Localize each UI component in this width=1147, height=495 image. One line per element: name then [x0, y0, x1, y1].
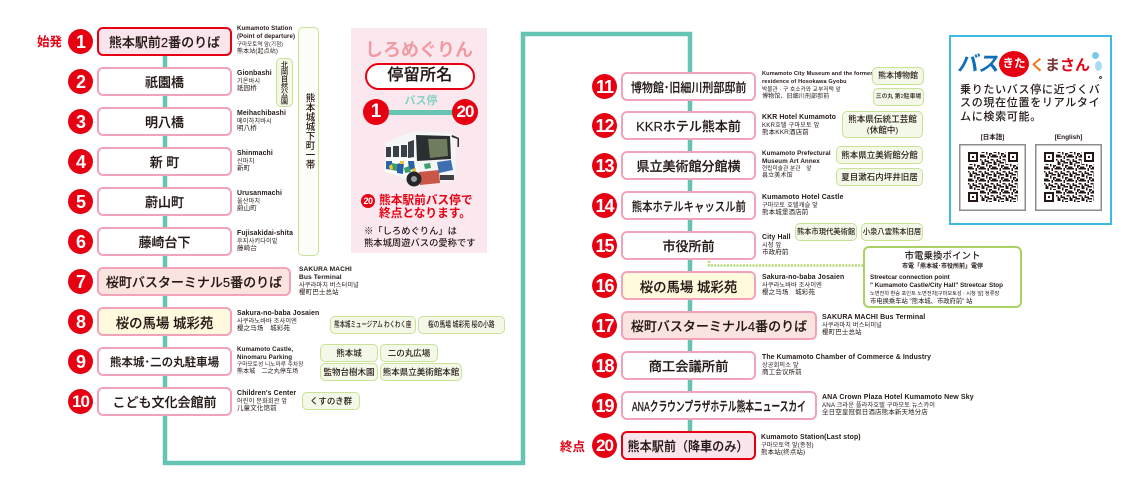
stop 13: 县立美术馆 — [762, 173, 793, 179]
stop 14: 熊本城堡酒店前 — [762, 209, 808, 216]
callout heading: 市電乗換ポイント — [904, 251, 980, 262]
legend route sample: 20 — [457, 102, 473, 121]
stop 13: 13 — [595, 156, 614, 176]
search description — [960, 84, 1100, 123]
callout details: Streetcar connection point — [870, 274, 950, 281]
tag: Wakuwaku-za — [330, 316, 416, 334]
QR label English: [English] — [1055, 134, 1082, 141]
tag: castle town area — [298, 27, 319, 256]
tag: Kitaoka park: 北岡自然公園 — [280, 61, 290, 104]
panel: Shiromegurin legend — [351, 28, 487, 253]
tag: Art Museum annex — [836, 146, 923, 164]
stop 11 — [592, 71, 872, 101]
tag: castle town area: 熊本城城下町一帯 — [304, 93, 314, 169]
tag: Kitaoka park — [276, 58, 293, 107]
callout details: 市电换乘车站 "熊本城、市政府前" 站 — [870, 298, 972, 305]
legend route sample — [363, 94, 478, 125]
stop 8: 桜の馬場 城彩苑 — [116, 316, 213, 330]
tag: Sannomaru parking — [873, 88, 924, 106]
stop 8: 8 — [76, 312, 85, 332]
note: terminus: 20 — [363, 196, 372, 206]
stop 6 — [68, 227, 293, 256]
stop 19: 19 — [595, 396, 614, 416]
stop 18: 상공회의소 앞 — [762, 362, 799, 369]
tag: Kenmotsudai — [320, 363, 378, 381]
callout details — [870, 274, 1003, 305]
note: terminus: 熊本駅前バス停で — [379, 194, 473, 207]
stop 18: 18 — [595, 356, 614, 376]
stop 10 — [68, 387, 296, 416]
stop 13: 현립미술관 분관 앞 — [762, 166, 812, 172]
stop 20: 20 — [596, 436, 613, 455]
stop 19: ANA Crown Plaza Hotel Kumamoto New Sky — [822, 394, 974, 401]
stop 19 — [592, 391, 974, 420]
stop 5: 蔚山町 — [237, 205, 257, 212]
logo: Bus Kitakumasan — [956, 51, 1102, 79]
stop 1: 구마모토역 앞(기점) — [237, 42, 283, 48]
tag: Kenmotsudai: 監物台樹木園 — [323, 367, 374, 377]
stop 6: 6 — [76, 232, 85, 252]
stop 12: KKR호텔 구마모토 앞 — [762, 122, 819, 129]
icon: bus — [385, 131, 459, 186]
stop 2: 祇園橋 — [145, 75, 184, 90]
stop 17: 사쿠라마치 버스터미널 — [822, 322, 882, 329]
stop 17: 17 — [595, 316, 614, 336]
stop 1: (Point of departure) — [237, 34, 295, 40]
stop 20: 구마모토역 앞(종점) — [761, 442, 814, 449]
stop 9: Kumamoto Castle, — [237, 346, 293, 353]
stop 15: 시청 앞 — [762, 242, 781, 249]
stop 15: 市役所前 — [662, 239, 714, 254]
stop 12: 熊本KKR酒店前 — [762, 129, 809, 136]
tag: Contemporary Art Museum: 熊本市現代美術館 — [797, 227, 855, 236]
stop 9 — [68, 346, 304, 376]
stop 13: Kumamoto Prefectural — [762, 150, 831, 157]
legend heading pill: 停留所名 — [387, 67, 453, 84]
stop 10: 어린이 문화회관 앞 — [237, 398, 287, 405]
tag: Sannomaru parking: 三の丸 第2駐車場 — [876, 94, 921, 100]
stop 5: 蔚山町 — [145, 195, 184, 210]
stop 7: 사쿠라마치 버스터미널 — [299, 282, 359, 288]
stop 8: Sakura-no-baba Josaien — [237, 310, 319, 317]
stop 13: Museum Art Annex — [762, 158, 820, 165]
stop 3: 明八橋 — [145, 115, 184, 130]
QR code English — [1035, 144, 1102, 211]
stop 12: KKRホテル熊本前 — [636, 119, 741, 134]
stop 1: 熊本站(起点站) — [237, 49, 278, 55]
stop 14: 熊本ホテルキャッスル前 — [631, 200, 746, 214]
stop 5 — [68, 187, 282, 216]
logo: Bus Kitakumasan: バス — [956, 53, 1002, 76]
callout details: 노면전차 환승 포인트 노면전차[구마모토성 · 시청 앞] 정류장 — [870, 291, 999, 297]
stop 18: The Kumamoto Chamber of Commerce & Industry — [762, 354, 931, 361]
stop 3: 明八桥 — [237, 125, 257, 132]
label: terminus: 終点 — [560, 440, 585, 454]
stop 16: 桜の馬場 城彩苑 — [640, 280, 737, 294]
stop 2: Gionbashi — [237, 70, 272, 77]
search description: スの現在位置をリアルタイ — [960, 97, 1100, 109]
callout subheading: 市電「熊本城･市役所前」電停 — [902, 264, 983, 270]
stop 19: ANAクラウンプラザホテル熊本ニュースカイ — [632, 399, 806, 414]
search description: 乗りたいバス停に近づくバ — [960, 84, 1100, 96]
stop 10: こども文化会館前 — [112, 395, 216, 410]
stop 7: 7 — [76, 272, 85, 292]
stop 7 — [68, 266, 359, 296]
tag: Traditional Crafts Center: (休館中) — [867, 124, 898, 134]
stop 15: 15 — [595, 236, 614, 256]
stop 10: 儿童文化馆前 — [237, 405, 277, 412]
stop 9: Ninomaru Parking — [237, 354, 292, 361]
stop 17: 桜町バスターミナル4番のりば — [631, 319, 807, 334]
label: departure: 始発 — [37, 35, 62, 49]
tag: Art Museum main: 熊本県立美術館本館 — [383, 367, 459, 377]
stop 4: Shinmachi — [237, 150, 273, 157]
stop 18 — [592, 351, 931, 380]
tag: Sakura no Koji — [418, 316, 505, 334]
stop 6: 藤崎台 — [237, 245, 257, 252]
tag: Traditional Crafts Center — [842, 111, 923, 138]
logo: Bus Kitakumasan: くまさん — [1030, 57, 1090, 74]
stop 14: 14 — [595, 196, 614, 216]
stop 8 — [68, 307, 319, 336]
tag: Art Museum main — [380, 363, 462, 381]
stop 9: 구마모토성 니노마루 주차장 — [237, 362, 304, 368]
stop 18: 商工会議所前 — [649, 359, 728, 374]
stop 16: 樱之马场 城彩苑 — [762, 289, 815, 296]
tag: Contemporary Art Museum — [795, 223, 857, 241]
tag: Art Museum annex: 熊本県立美術館分館 — [841, 150, 918, 160]
tag: Kumamoto Castle: 熊本城 — [336, 348, 362, 358]
stop 3 — [68, 107, 286, 136]
stop 7: 桜町バスターミナル5番のりば — [106, 275, 282, 290]
legend route sample: バス停 — [404, 95, 438, 107]
stop 11: 博物馆、旧细川刑部邸前 — [762, 94, 829, 100]
note: nickname: ※「しろめぐりん」は — [364, 226, 457, 236]
stop 9: 9 — [76, 352, 85, 372]
stop 5: 울산마치 — [237, 198, 260, 205]
stop 17 — [592, 311, 925, 340]
stop 3: Meihachibashi — [237, 110, 286, 117]
callout: streetcar connection — [863, 246, 1022, 308]
stop 3: 메이하치바시 — [237, 118, 272, 125]
stop 1 — [68, 26, 295, 56]
stop 12: KKR Hotel Kumamoto — [762, 114, 836, 121]
logo: Bus Kitakumasan: きた — [1002, 58, 1026, 70]
stop 1: 1 — [76, 32, 85, 52]
stop 15: 市政府前 — [762, 249, 788, 256]
stop 16: 사쿠라노바바 조사이엔 — [762, 282, 822, 289]
panel: real-time bus search — [949, 35, 1112, 225]
stop 10: 10 — [72, 392, 89, 411]
stop 11: residence of Hosokawa Gyobu — [762, 79, 847, 85]
tag: City Museum — [872, 67, 924, 85]
dotted connector — [708, 261, 863, 267]
stop 20: 熊本駅前（降車のみ） — [628, 439, 749, 454]
stop 11: 박물관 · 구 호소카와 교부저택 앞 — [762, 86, 841, 92]
stop 17: 樱町巴士总站 — [822, 329, 862, 336]
stop 5: 5 — [76, 192, 85, 212]
tag: Wakuwaku-za: 熊本城ミュージアム わくわく座 — [334, 320, 412, 329]
stop 9: 熊本城 二之丸停车场 — [237, 369, 298, 375]
stop 14: 구마모토 호텔캐슬 앞 — [762, 202, 818, 209]
stop 4: 新 町 — [150, 155, 179, 170]
legend title: しろめぐりん — [365, 40, 473, 60]
note: terminus: 終点となります。 — [379, 207, 471, 220]
stop 19: ANA 크라운 플라자호텔 구마모토 뉴스카이 — [822, 402, 935, 409]
legend route sample: 1 — [371, 101, 381, 122]
stop 11: 博物館･旧細川刑部邸前 — [631, 81, 746, 95]
stop 8: 樱之马场 城彩苑 — [237, 325, 290, 332]
stop 1: 熊本駅前2番のりば — [109, 35, 220, 50]
stop 18: 商工会议所前 — [762, 369, 802, 376]
stop 2: 기온바시 — [237, 78, 260, 85]
tag: Soseki house — [836, 168, 923, 186]
stop 8: 사쿠라노바바 조사이엔 — [237, 318, 297, 325]
stop 12 — [592, 111, 836, 140]
stop 20 — [592, 431, 861, 460]
stop 15 — [592, 231, 791, 260]
stop 2 — [68, 67, 272, 96]
tag: Ninomaru Hiroba: 二の丸広場 — [388, 348, 430, 358]
stop 6: Fujisakidai-shita — [237, 230, 293, 237]
stop 7: Bus Terminal — [299, 274, 342, 281]
note: terminus — [361, 194, 473, 220]
stop 15: City Hall — [762, 234, 791, 241]
note: nickname — [364, 226, 476, 248]
stop 3: 3 — [76, 112, 85, 132]
stop 4 — [68, 147, 273, 176]
stop 19: 全日空皇冠假日酒店熊本新天地分店 — [822, 409, 928, 416]
search description: ムに検索可能。 — [960, 111, 1042, 123]
stop 4: 新町 — [237, 165, 250, 172]
stop 5: Urusanmachi — [237, 190, 282, 197]
stop 1: Kumamoto Station — [237, 26, 292, 32]
stop 14: Kumamoto Hotel Castle — [762, 194, 843, 201]
stop 16: Sakura-no-baba Josaien — [762, 274, 844, 281]
tag: Koizumi Yakumo house — [861, 223, 923, 241]
tag: Sakura no Koji: 桜の馬場 城彩苑 桜の小路 — [428, 320, 495, 329]
stop 12: 12 — [595, 116, 614, 136]
stop 6: 藤崎台下 — [138, 235, 190, 250]
tag: Soseki house: 夏目漱石内坪井旧居 — [841, 172, 918, 182]
tag: Kusunoki: くすのき群 — [310, 396, 352, 406]
stop 17: SAKURA MACHI Bus Terminal — [822, 314, 925, 321]
tag: Kusunoki — [302, 392, 360, 410]
tag: Traditional Crafts Center: 熊本県伝統工芸館 — [848, 114, 917, 124]
stop 7: 樱町巴士总站 — [299, 289, 339, 296]
stop 13 — [592, 150, 831, 180]
stop 7: SAKURA MACHI — [299, 266, 352, 273]
stop 2: 2 — [76, 72, 85, 92]
stop 11: Kumamoto City Museum and the former — [762, 71, 872, 77]
legend heading pill — [365, 63, 475, 90]
stop 16 — [592, 271, 844, 300]
callout details: " Kumamoto Castle/City Hall" Streetcar Stop — [870, 282, 1003, 289]
stop 16: 16 — [595, 276, 614, 296]
note: nickname: 熊本城周遊バスの愛称です — [364, 238, 476, 248]
tag: City Museum: 熊本博物館 — [878, 71, 918, 80]
stop 11: 11 — [596, 76, 613, 96]
QR label Japanese: [日本語] — [981, 134, 1004, 141]
stop 20: 熊本站(终点站) — [761, 449, 805, 456]
tag: Ninomaru Hiroba — [380, 344, 438, 362]
tag: Koizumi Yakumo house: 小泉八雲熊本旧居 — [863, 227, 921, 236]
stop 4: 4 — [76, 152, 85, 172]
stop 13: 県立美術館分館横 — [636, 159, 740, 174]
stop 9: 熊本城･二の丸駐車場 — [110, 356, 219, 368]
stop 6: 후지사키다이밑 — [237, 238, 278, 245]
stop 4: 신마치 — [237, 158, 254, 165]
QR code Japanese — [959, 144, 1026, 211]
stop 14 — [592, 191, 844, 220]
stop 20: Kumamoto Station(Last stop) — [761, 434, 861, 441]
stop 2: 祇园桥 — [237, 85, 257, 92]
stop 10: Children's Center — [237, 390, 296, 397]
tag: Kumamoto Castle — [320, 344, 378, 362]
